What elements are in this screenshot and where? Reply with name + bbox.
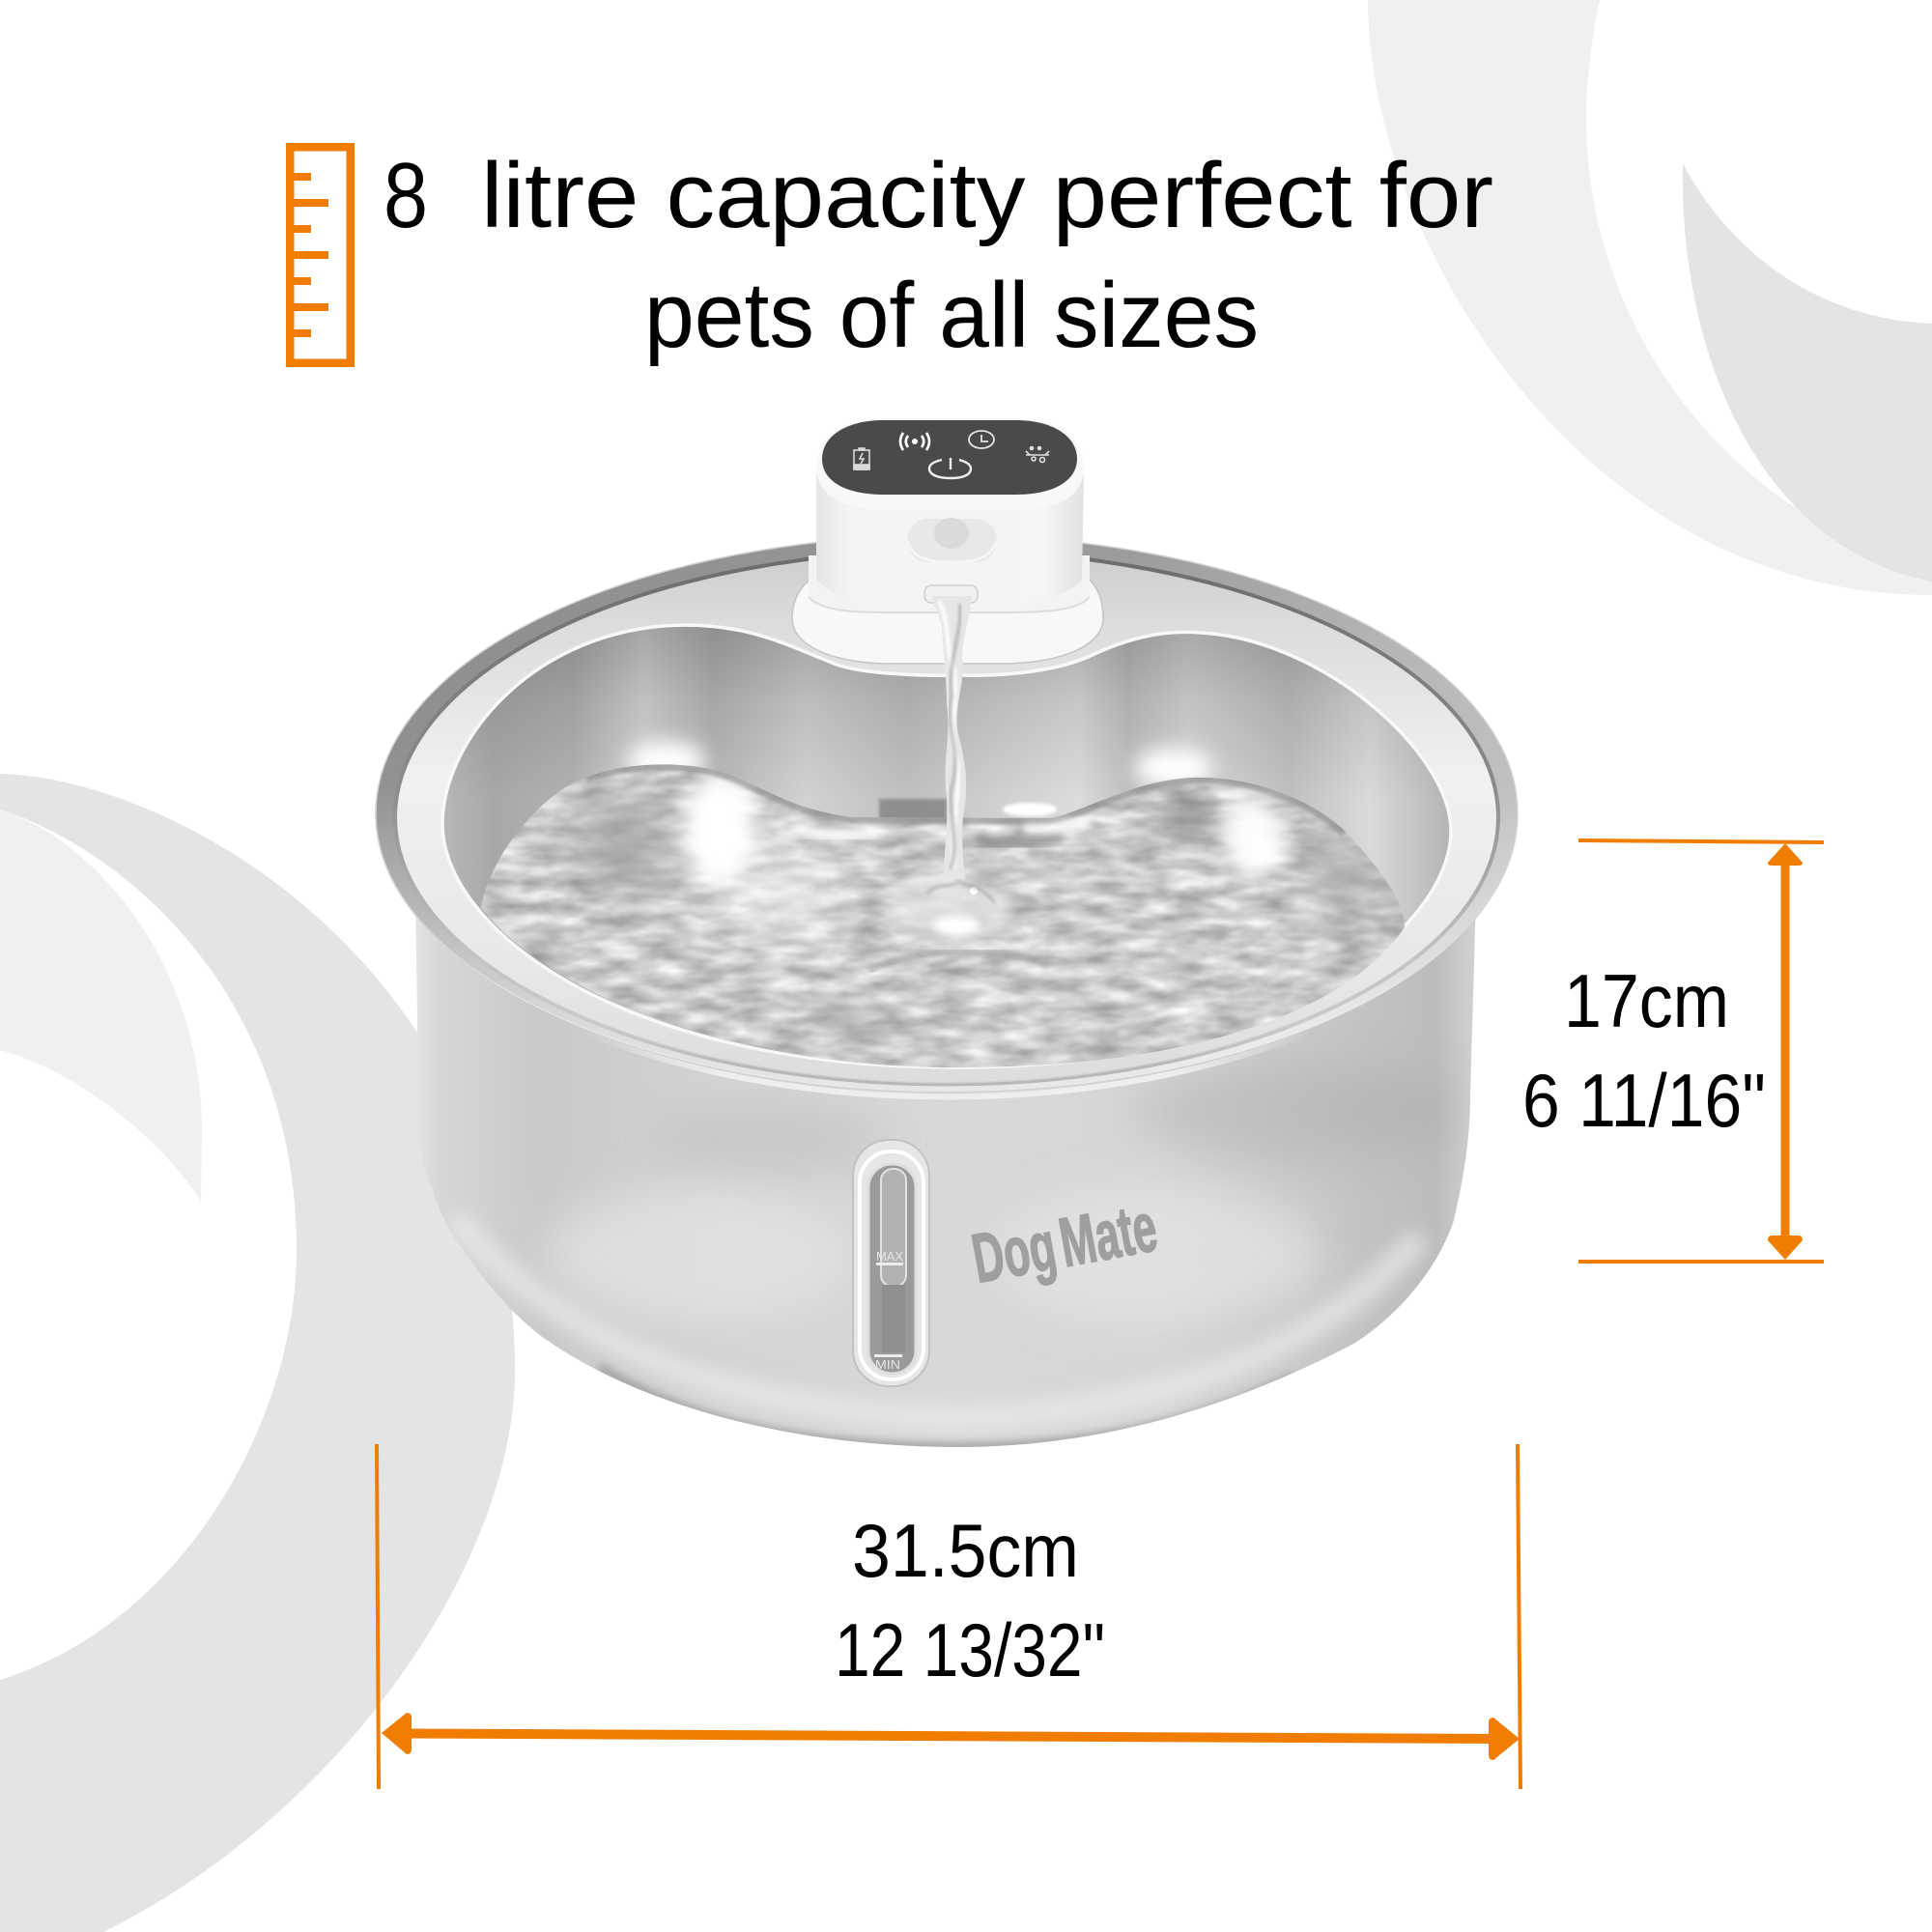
height label — [1522, 958, 1766, 1143]
pump housing — [816, 473, 1084, 609]
pump unit and control panel — [792, 418, 1103, 664]
spout — [924, 585, 978, 603]
width label: 12 13/32" — [835, 1607, 1105, 1692]
icon: orange ruler — [286, 143, 355, 367]
height label: 6 11/16" — [1522, 1058, 1766, 1143]
heading: 8 — [384, 144, 428, 247]
motion sensor window — [907, 518, 997, 562]
width label: 31.5cm — [852, 1508, 1079, 1593]
icon: battery — [854, 448, 869, 469]
heading — [384, 144, 1493, 367]
water level label: MAX: MAX — [876, 1249, 903, 1264]
pump flange — [792, 578, 1103, 664]
height dimension arrow — [1578, 838, 1824, 1264]
icon: clock — [969, 431, 994, 448]
water stream from spout — [927, 596, 995, 935]
height label: 17cm — [1564, 958, 1729, 1043]
product: stainless steel water fountain bowl — [376, 418, 1518, 1447]
brand logo: Dog Mate — [966, 1188, 1163, 1298]
opening outline — [442, 625, 1451, 1067]
background swirl: lower left — [0, 774, 515, 1932]
width label — [835, 1508, 1105, 1692]
water surface — [473, 753, 1420, 1077]
top cap — [816, 418, 1084, 510]
inner wall of the bowl — [435, 618, 1459, 1072]
bowl body — [415, 918, 1476, 1447]
heading: pets of all sizes — [644, 264, 1259, 367]
pump collar — [809, 555, 1090, 612]
water level label: MIN: MIN — [875, 1357, 900, 1372]
icon: power button — [929, 458, 971, 478]
width dimension arrow — [375, 1444, 1522, 1789]
heading: litre capacity perfect for — [481, 144, 1493, 247]
water level window — [853, 1140, 929, 1386]
background swirl: top right — [1368, 0, 1932, 595]
rim — [376, 535, 1518, 1097]
icon: water level — [1026, 446, 1049, 462]
icon: motion sensor — [900, 433, 929, 450]
dark touch panel — [822, 420, 1077, 495]
